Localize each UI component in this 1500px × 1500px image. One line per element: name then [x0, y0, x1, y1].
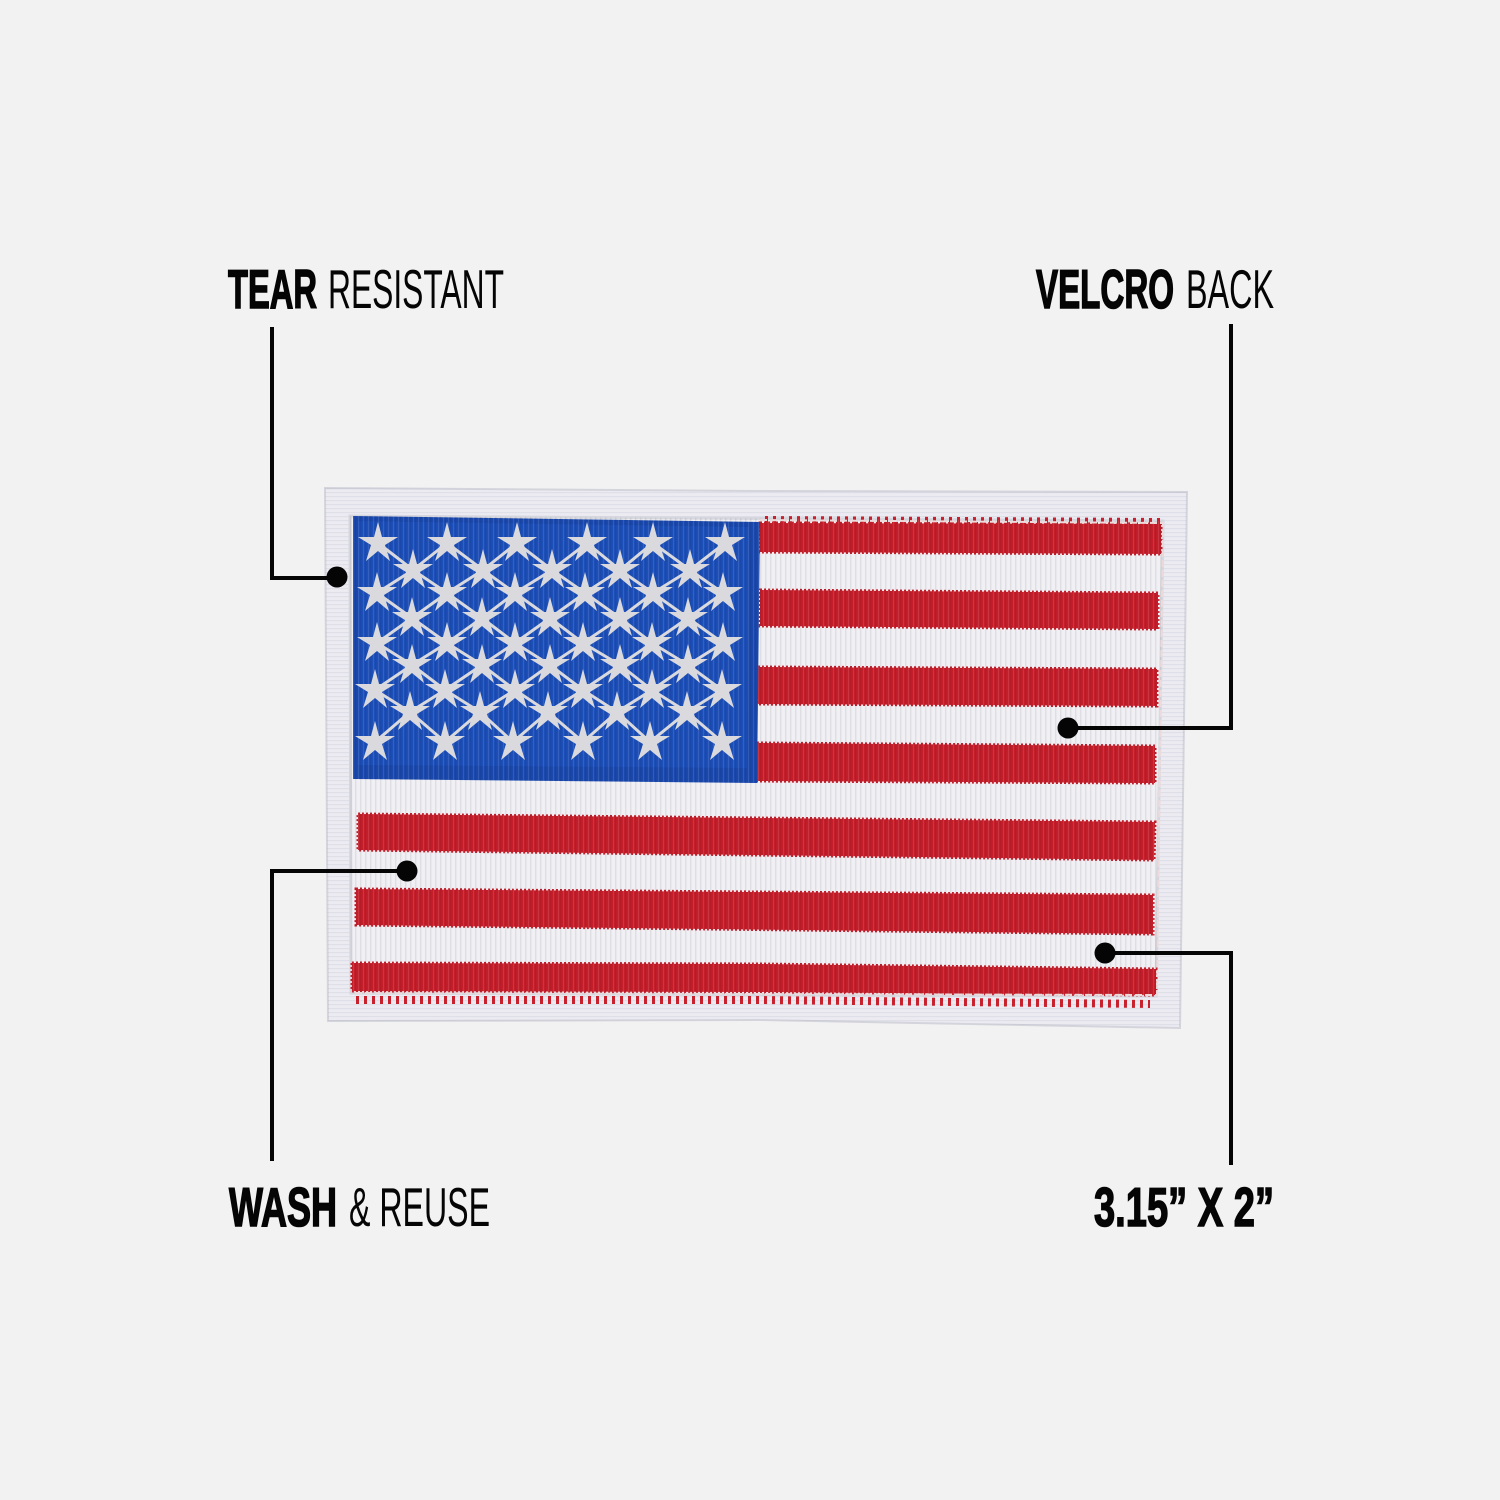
- red thread bleed: [356, 520, 1160, 1004]
- callout: tear resistant: [228, 258, 504, 588]
- marker dot: [1058, 718, 1078, 738]
- label: tear resistant: TEAR: [228, 258, 317, 320]
- marker dot: [1094, 942, 1116, 964]
- stitch line: [352, 520, 1163, 995]
- label: wash and reuse: WASH: [229, 1176, 337, 1238]
- white field: [350, 516, 1163, 996]
- callout: wash and reuse: [229, 860, 490, 1238]
- label: velcro back: BACK: [1186, 258, 1274, 320]
- marker dot: [396, 860, 418, 882]
- leader line: [272, 871, 407, 1161]
- thread texture: [350, 516, 1163, 996]
- leader line: [272, 327, 337, 578]
- label: velcro back: VELCRO: [1036, 258, 1174, 320]
- star connecting threads: [375, 543, 725, 742]
- patch border: [325, 488, 1187, 1028]
- label: tear resistant: RESISTANT: [328, 258, 504, 320]
- label: dimensions: 3.15” X 2”: [1094, 1176, 1274, 1238]
- canton with stars: [353, 516, 760, 783]
- callout: velcro back: [1036, 258, 1274, 738]
- stars: [355, 522, 745, 760]
- leader line: [1105, 953, 1231, 1165]
- red stripes: [352, 523, 1161, 995]
- label: wash and reuse: & REUSE: [349, 1176, 490, 1238]
- label: tear resistant: [228, 258, 504, 320]
- callout: dimensions: [1094, 942, 1274, 1238]
- leader line: [1068, 324, 1231, 728]
- marker dot: [326, 566, 348, 588]
- flag patch: [325, 488, 1187, 1028]
- label: wash and reuse: [229, 1176, 490, 1238]
